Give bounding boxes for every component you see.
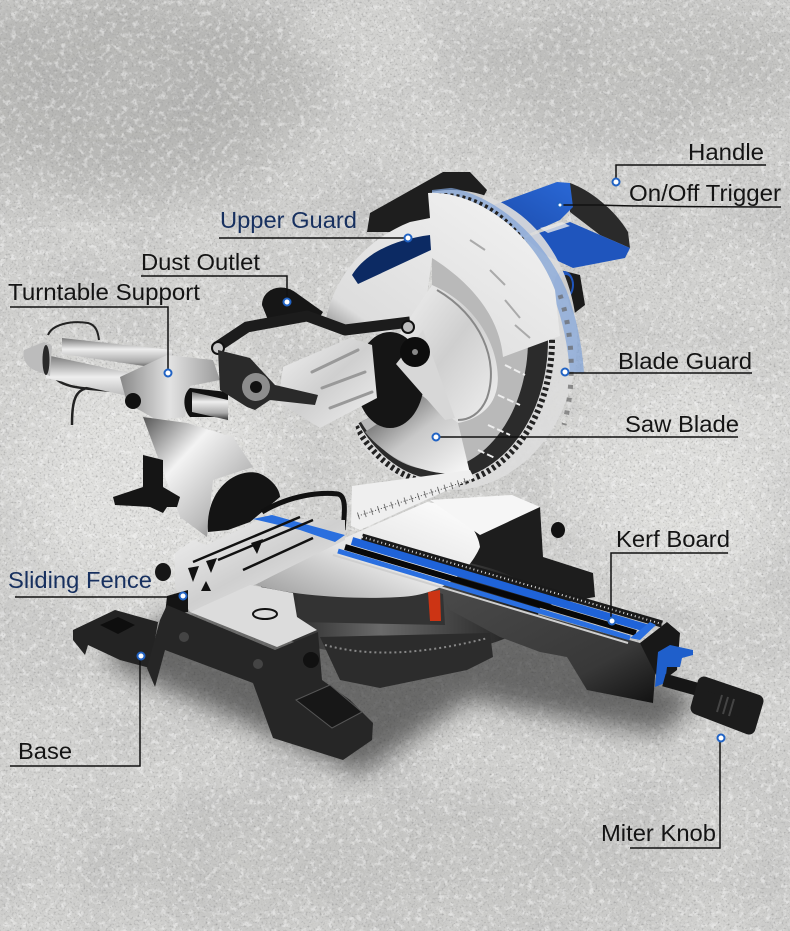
callout: sliding fence: Sliding Fence xyxy=(8,567,152,593)
callout: saw blade xyxy=(432,411,739,440)
saw: transparent blade guard xyxy=(325,190,577,490)
saw: black handle back xyxy=(367,172,487,232)
callout: miter knob xyxy=(601,734,724,848)
saw: kerf board xyxy=(333,537,662,643)
callout: turntable support xyxy=(8,279,201,376)
saw: lower guard plate xyxy=(365,393,470,474)
callout: sliding fence xyxy=(8,567,186,600)
saw: miter knob xyxy=(664,680,757,728)
callout: dust outlet: Dust Outlet xyxy=(141,249,261,275)
saw: slide rails and support xyxy=(23,322,253,537)
saw: right side body xyxy=(440,587,657,703)
callout: upper guard xyxy=(219,207,412,242)
callout: handle: Handle xyxy=(688,139,764,165)
icon: fence knob right xyxy=(551,522,565,538)
callout: blade guard: Blade Guard xyxy=(618,348,752,374)
callout: upper guard: Upper Guard xyxy=(220,207,357,233)
callout: handle xyxy=(612,139,766,186)
callout: saw blade: Saw Blade xyxy=(625,411,739,437)
saw: link arm xyxy=(212,316,414,354)
saw: centre cover xyxy=(356,285,498,428)
saw: right fence block xyxy=(450,507,595,610)
callout: base: Base xyxy=(18,738,72,764)
floor shadow under the saw xyxy=(100,600,700,775)
callout: on/off trigger: On/Off Trigger xyxy=(629,180,781,206)
callout: turntable support: Turntable Support xyxy=(8,279,201,305)
saw: upper guard xyxy=(325,193,560,357)
saw: left sliding fence xyxy=(155,515,345,615)
saw: black pivot dome and cable xyxy=(208,472,344,532)
saw: end block xyxy=(640,622,680,683)
saw: pivot hub xyxy=(218,350,318,410)
saw: blue handle xyxy=(485,182,630,315)
callout: on/off trigger xyxy=(558,180,781,208)
saw: dust outlet xyxy=(262,288,323,325)
callout: miter knob: Miter Knob xyxy=(601,820,716,846)
callout: kerf board xyxy=(608,526,730,624)
saw: circular blade xyxy=(334,196,552,484)
saw: blue lever xyxy=(655,645,693,687)
callout: kerf board: Kerf Board xyxy=(616,526,730,552)
saw: bevel lock knob xyxy=(113,455,180,513)
saw: depth scale xyxy=(351,470,474,530)
saw: ribbed motor plate xyxy=(278,338,377,428)
callout: base xyxy=(10,652,144,766)
callout: blade guard xyxy=(562,348,752,376)
saw: turntable xyxy=(250,495,540,688)
saw: left base xyxy=(73,585,373,760)
callout: dust outlet xyxy=(141,249,290,306)
